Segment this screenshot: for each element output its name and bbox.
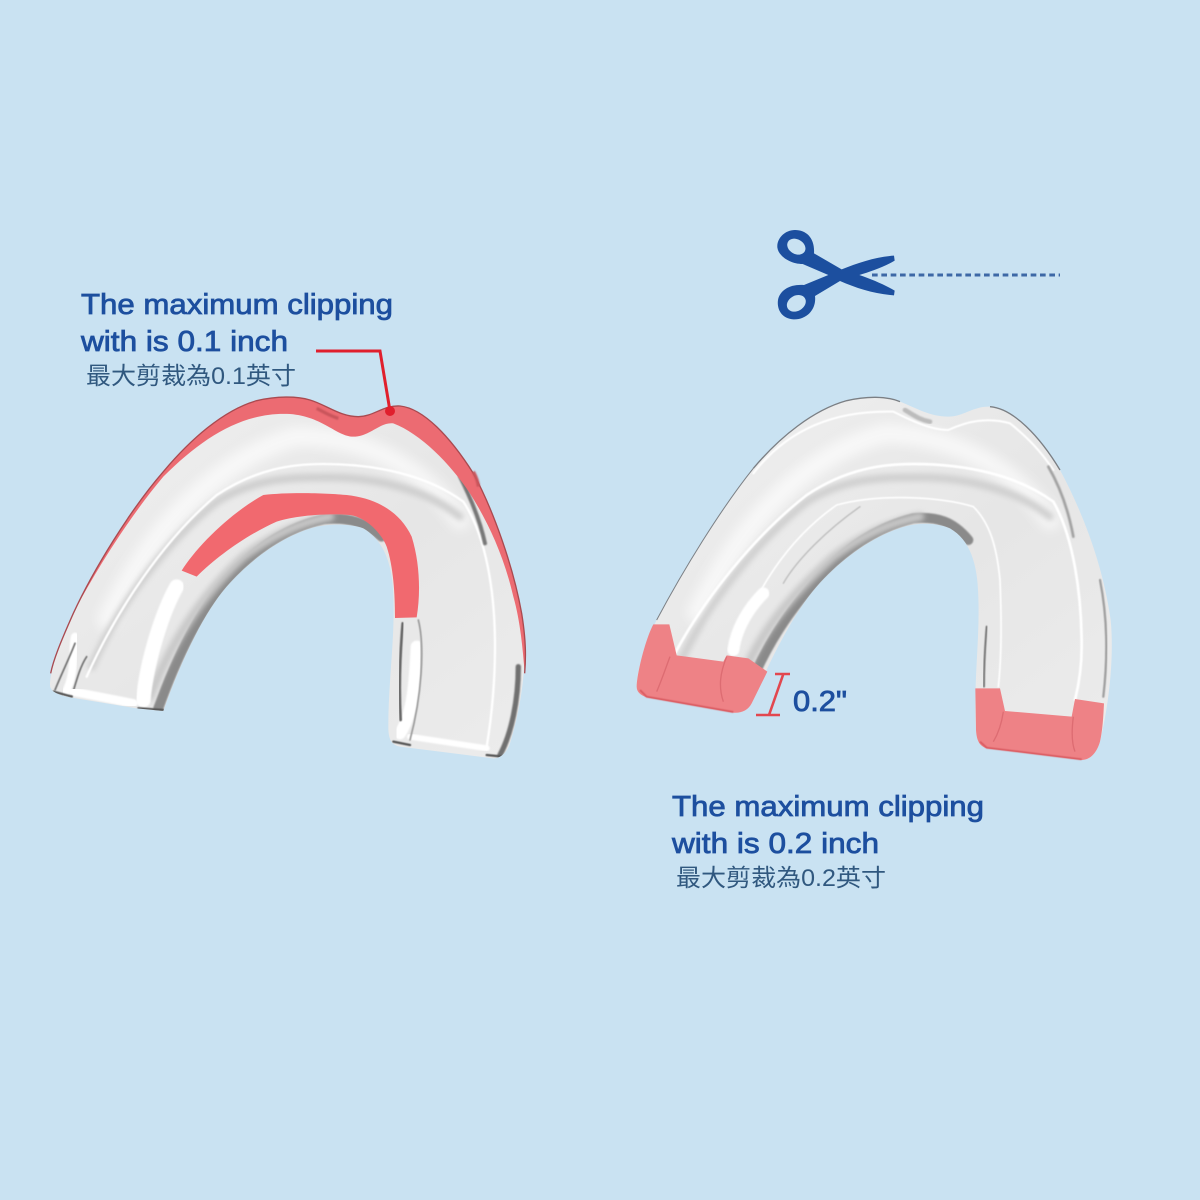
- heading: right clipping caption: with is 0.2 inch: [671, 828, 879, 860]
- heading: right clipping caption: [671, 791, 984, 892]
- red outer edge trim: [51, 397, 525, 673]
- heading: right clipping caption: The maximum clipping: [672, 791, 984, 823]
- heading: left clipping caption: The maximum clipping: [81, 289, 393, 321]
- heading: left clipping caption: 最大剪裁為0.1英寸: [86, 363, 296, 390]
- mouthguard: left with red edge trim: [50, 397, 525, 758]
- mouthguard: right with red tip trim: [637, 397, 1112, 760]
- red inner edge trim: [182, 493, 419, 618]
- leader line: points to trimmed edge: [316, 351, 395, 416]
- left tip trim: [637, 624, 767, 713]
- heading: left clipping caption: with is 0.1 inch: [80, 326, 288, 358]
- heading: right clipping caption: 最大剪裁為0.2英寸: [676, 865, 886, 892]
- heading: left clipping caption: [80, 289, 393, 390]
- right tip trim: [975, 688, 1104, 760]
- dimension marker: 0.2 inch: 0.2": [793, 686, 847, 718]
- dimension marker: 0.2 inch: [756, 674, 847, 718]
- icon: scissors with dashed cut line: [777, 230, 1060, 319]
